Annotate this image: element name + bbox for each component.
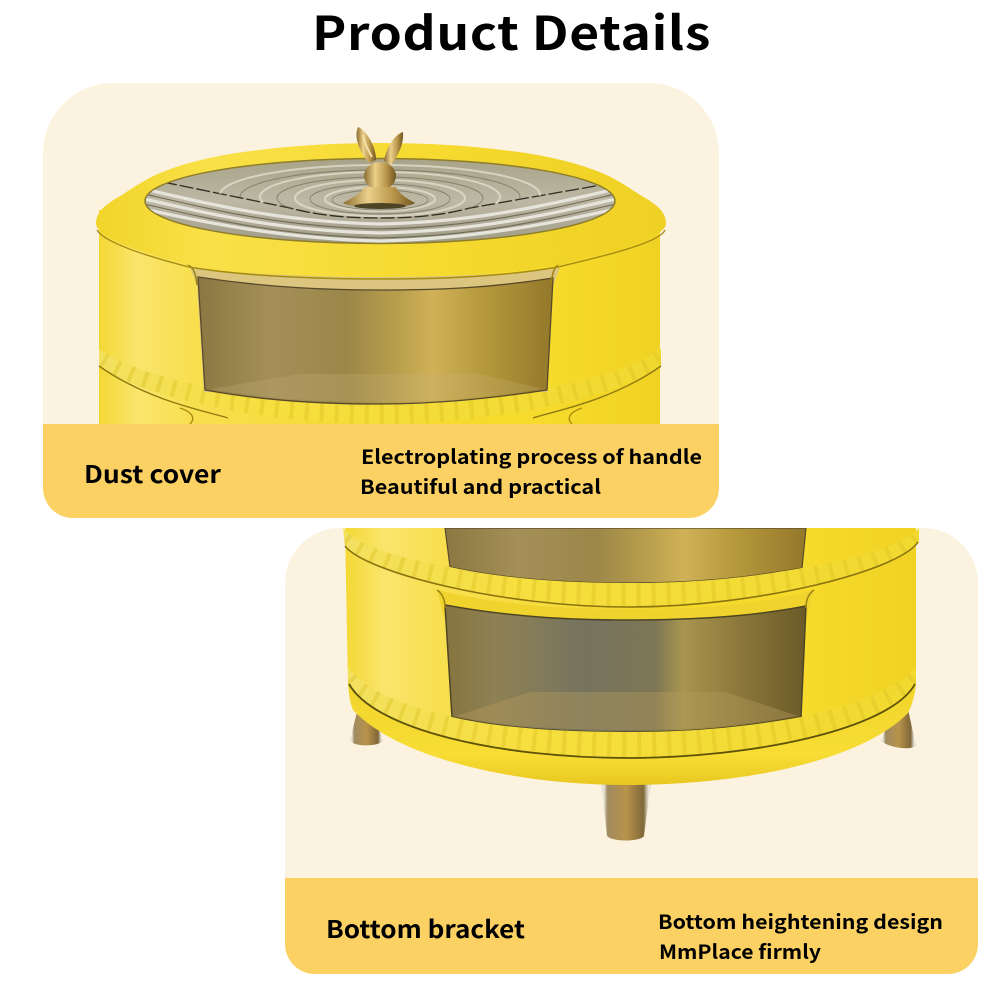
center leg bbox=[601, 782, 651, 840]
panel: bottom bracket bbox=[285, 528, 978, 974]
window glass bbox=[198, 277, 553, 404]
caption text: Bottom heightening design bbox=[658, 906, 943, 935]
product photo: base of organizer with legs bbox=[335, 528, 928, 840]
window floor reflection bbox=[210, 374, 543, 402]
lid rim bbox=[96, 143, 666, 277]
panel background bbox=[43, 83, 719, 424]
base bbox=[348, 684, 916, 785]
window side cutouts bbox=[187, 264, 559, 285]
caption band bbox=[43, 424, 719, 518]
lower window floor bbox=[456, 692, 798, 730]
caption text: Beautiful and practical bbox=[360, 471, 601, 500]
handle: golden rabbit bbox=[343, 127, 415, 209]
lower ribbed band bbox=[340, 668, 924, 758]
window side cutouts bbox=[437, 590, 814, 608]
glass lid panel bbox=[140, 158, 620, 244]
caption text: MmPlace firmly bbox=[659, 936, 821, 965]
upper window glass bbox=[445, 528, 806, 583]
caption text bbox=[360, 441, 702, 500]
caption band bbox=[285, 878, 978, 974]
panel background bbox=[285, 528, 978, 878]
lower window glass bbox=[445, 605, 806, 732]
caption heading: Dust cover bbox=[84, 456, 221, 491]
ribbed band bbox=[90, 349, 670, 424]
side leg right bbox=[881, 712, 916, 748]
window frame bbox=[190, 268, 560, 392]
drawer body bbox=[345, 528, 916, 717]
lower window frame strip bbox=[437, 590, 591, 620]
product photo: top of organizer with lid bbox=[90, 127, 670, 424]
chevron stripes bbox=[140, 188, 620, 241]
caption text: Electroplating process of handle bbox=[361, 441, 702, 470]
panel: dust cover bbox=[43, 83, 719, 518]
caption text bbox=[658, 906, 943, 965]
upper ribbed band bbox=[335, 528, 928, 607]
drawer body bbox=[99, 210, 660, 424]
side leg left bbox=[350, 714, 383, 746]
caption heading: Bottom bracket bbox=[326, 911, 525, 946]
ripple rings bbox=[219, 164, 541, 217]
